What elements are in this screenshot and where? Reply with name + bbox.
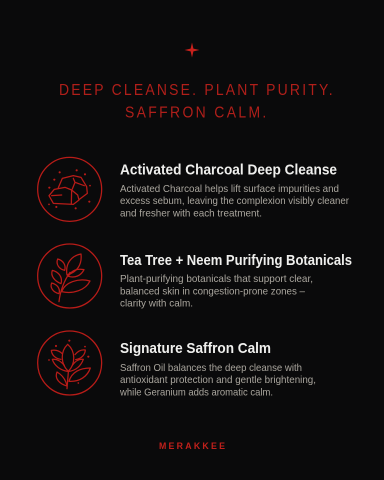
text block: saffron: while Geranium adds aromatic calm. — [119, 386, 273, 398]
text block: botanicals — [120, 253, 352, 310]
text block: charcoal: excess sebum, leaving the complexion visibly cleaner — [120, 195, 349, 207]
text block: botanicals: balanced skin in congestion-prone zones – — [120, 285, 305, 297]
text block: saffron: Saffron Oil balances the deep cleanse with — [120, 362, 302, 374]
icon: saffron flower in circle — [38, 331, 102, 395]
text block: charcoal: Activated Charcoal Deep Cleanse — [120, 162, 337, 178]
text block: saffron — [119, 341, 316, 398]
text block: saffron: Signature Saffron Calm — [120, 341, 271, 357]
text block: charcoal — [120, 162, 349, 219]
text block: botanicals: clarity with calm. — [120, 298, 193, 310]
text block: botanicals: Tea Tree + Neem Purifying Botanicals — [120, 253, 352, 269]
text block: charcoal: Activated Charcoal helps lift surface impurities and — [120, 183, 339, 195]
title: SAFFRON CALM. — [125, 105, 266, 122]
text block: botanicals: Plant-purifying botanicals that support clear, — [120, 273, 313, 285]
title: DEEP CLEANSE. PLANT PURITY. — [59, 82, 333, 99]
title — [59, 82, 333, 122]
icon: red four-point star — [184, 42, 200, 58]
text block: saffron: antioxidant protection and gentle brightening, — [120, 374, 316, 386]
brand wordmark: MERAKKEE — [159, 441, 225, 451]
icon: botanical sprig in circle — [38, 244, 102, 308]
text block: charcoal: and fresher with each treatment. — [120, 207, 262, 219]
icon: charcoal rocks in circle — [38, 157, 102, 221]
